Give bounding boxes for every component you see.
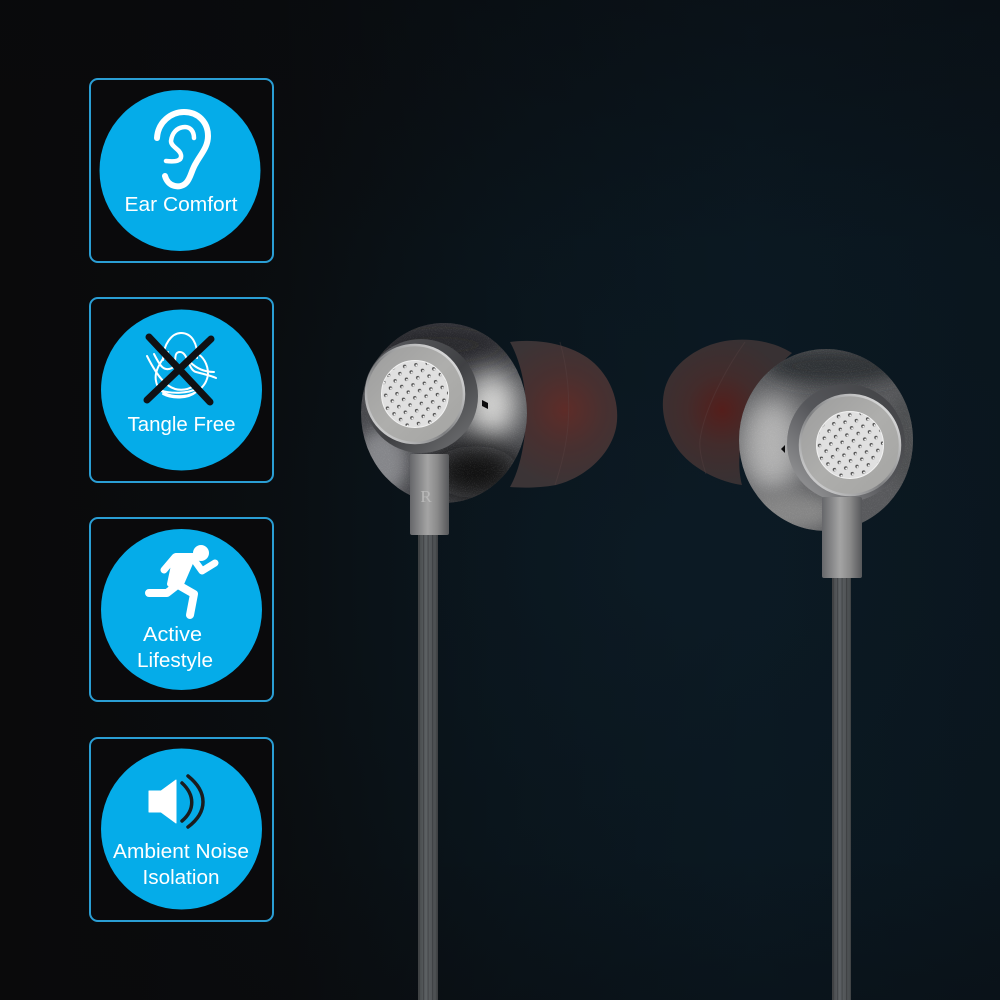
face plate: right	[800, 395, 900, 495]
label: isolation: Isolation	[142, 867, 220, 889]
panel: ear comfort	[90, 79, 273, 262]
label: tangle free: Tangle Free	[128, 414, 236, 436]
icon: ear	[157, 112, 208, 186]
icon: tangled cable crossed out	[147, 333, 216, 402]
ear tip: right	[663, 340, 792, 485]
label: active: Active	[143, 624, 202, 646]
left earbud	[355, 319, 617, 1000]
face plate: left	[366, 345, 464, 443]
label: ear comfort: Ear Comfort	[124, 194, 238, 216]
panel: ambient noise isolation	[90, 738, 273, 921]
icon: runner	[149, 545, 215, 615]
cable: left	[418, 530, 438, 1000]
collar: right	[787, 384, 905, 502]
panel: tangle free	[90, 298, 273, 482]
stem: right	[822, 497, 862, 578]
label: lifestyle: Lifestyle	[137, 650, 213, 672]
letter R: R	[420, 487, 432, 506]
cable: right	[832, 574, 851, 1000]
right earbud	[663, 340, 920, 1000]
collar: left	[364, 339, 478, 453]
panel: active lifestyle	[90, 518, 273, 701]
ear tip: left	[510, 341, 617, 488]
housing: right	[735, 345, 920, 535]
icon: speaker	[149, 776, 203, 827]
housing: left	[361, 323, 527, 503]
stem: left	[410, 454, 449, 535]
label: ambient noise: Ambient Noise	[113, 841, 249, 863]
